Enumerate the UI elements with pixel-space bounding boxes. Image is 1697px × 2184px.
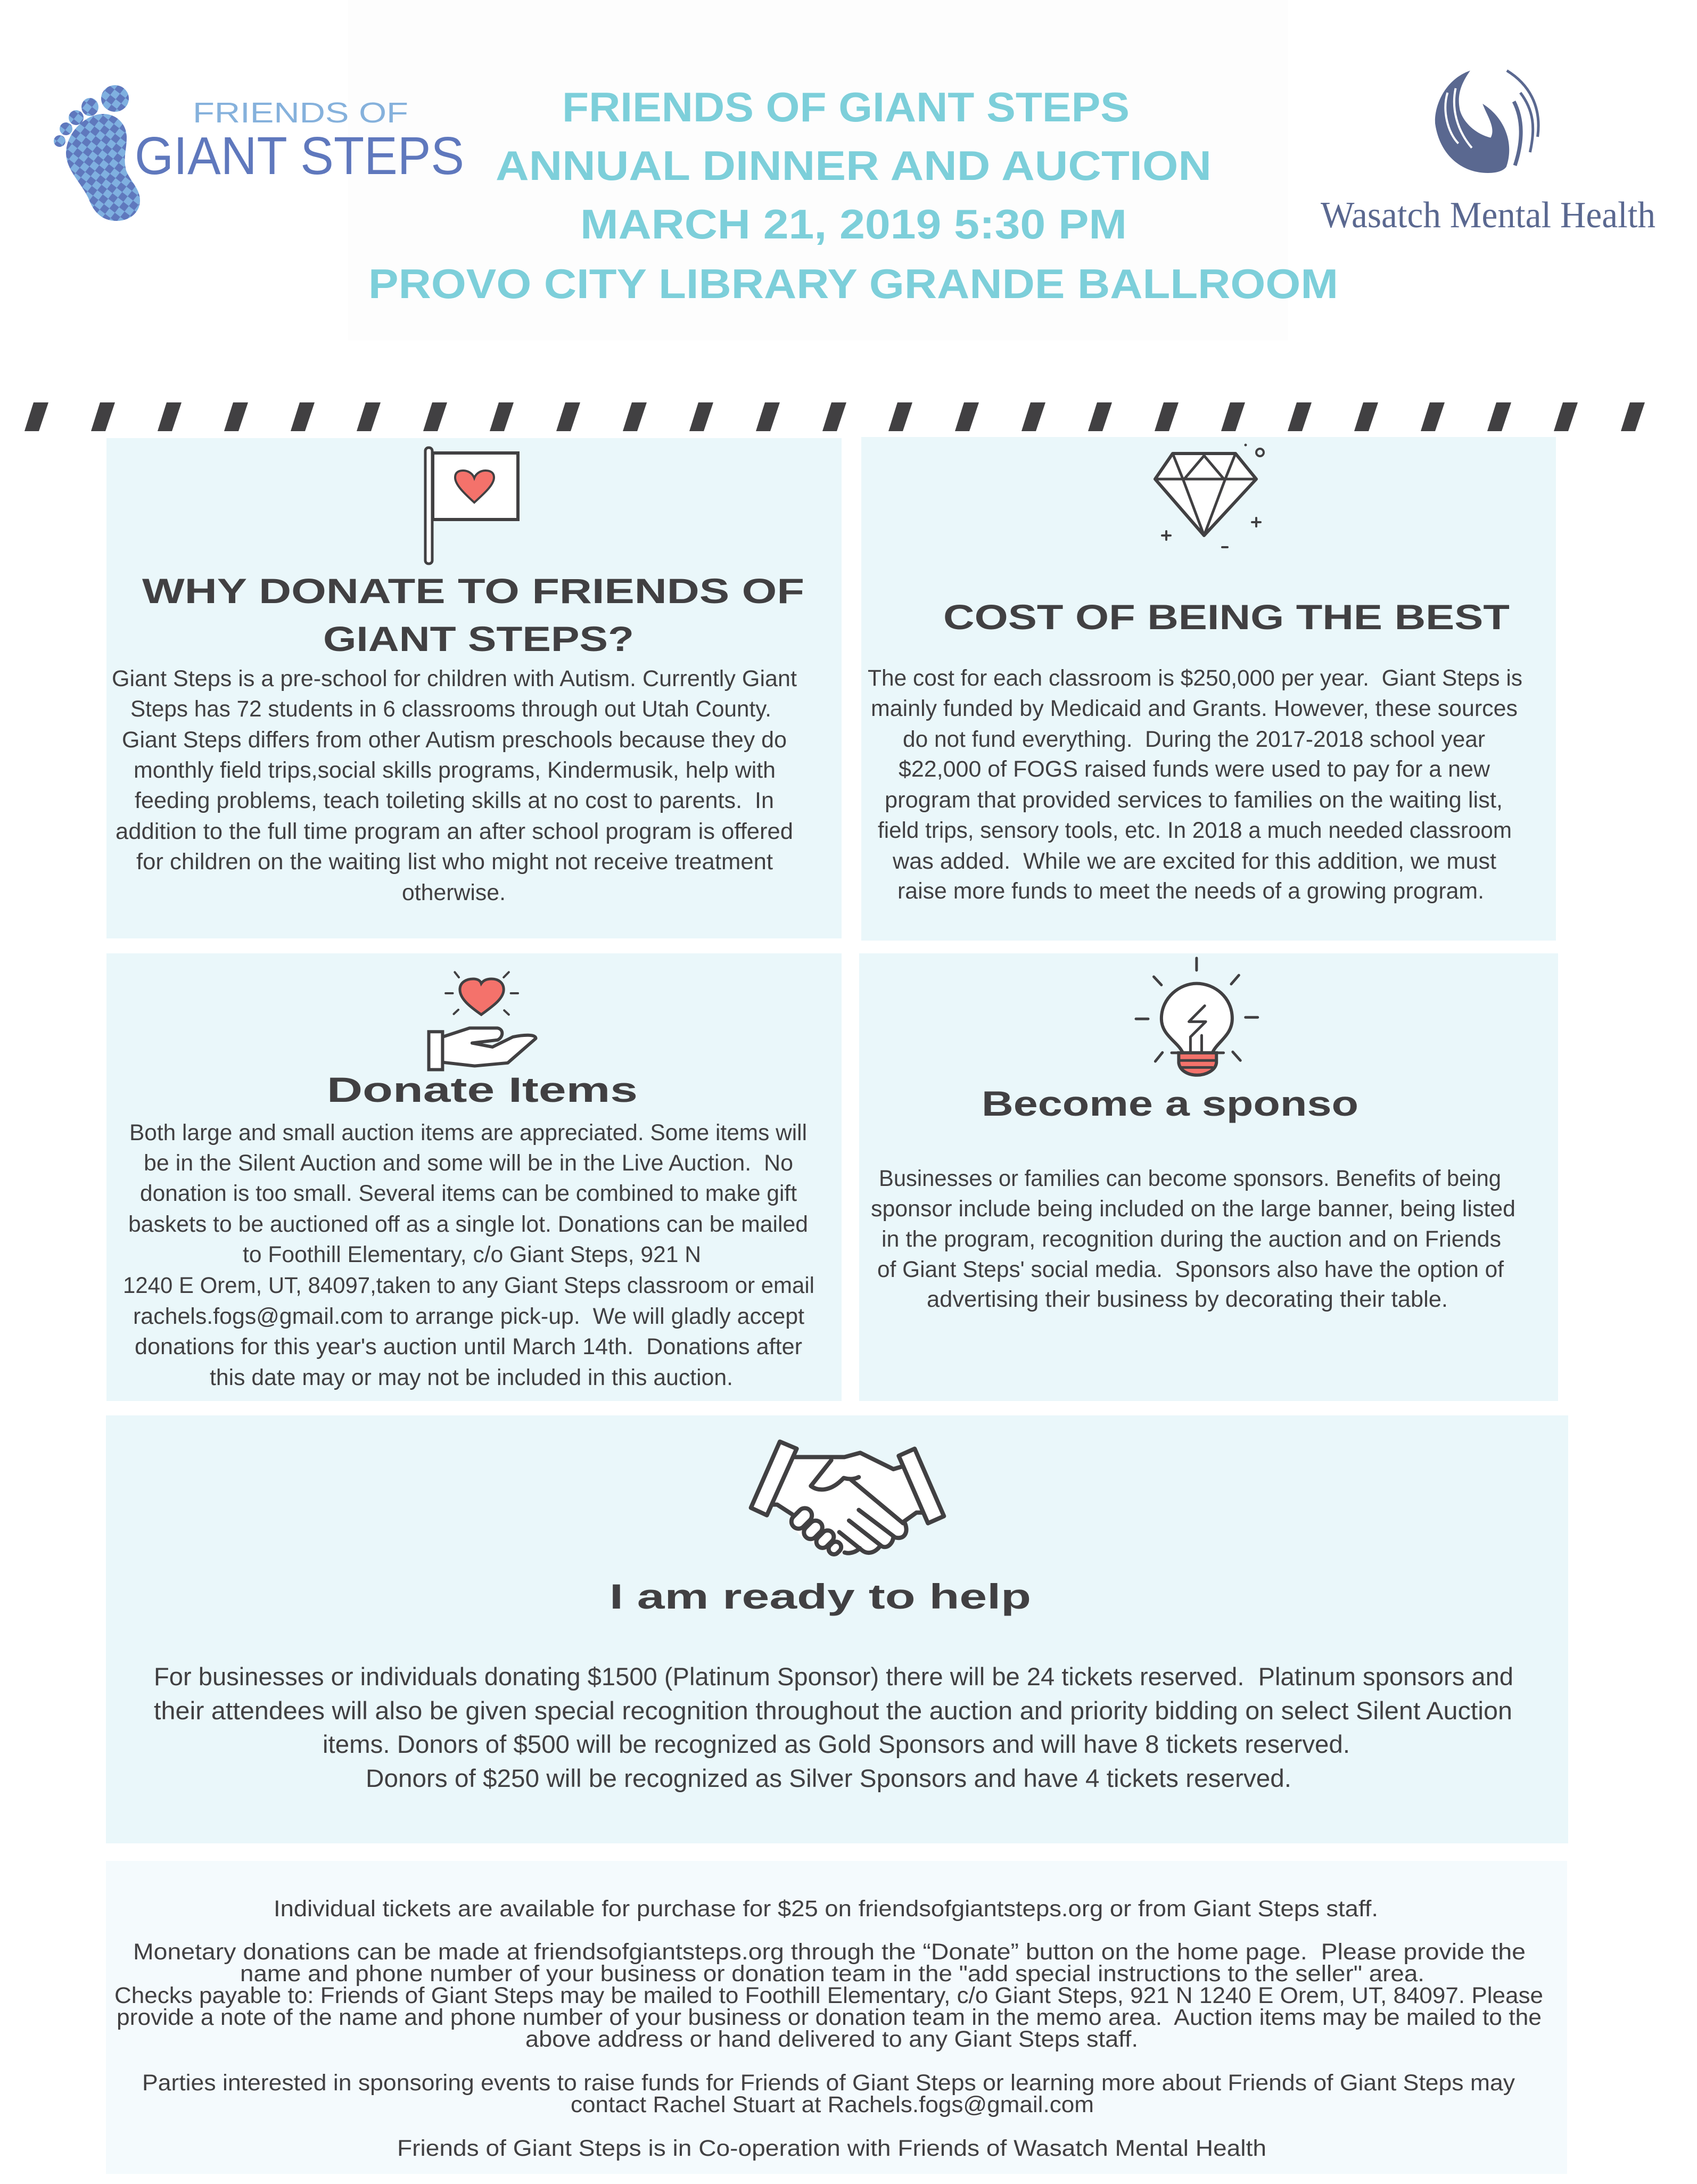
text block: baskets to be auctioned off as a single lot. Donations can be mailed	[128, 1211, 808, 1237]
divider: slanted dashes	[24, 402, 1645, 431]
icon: puzzle footprint	[54, 85, 140, 221]
text block: name and phone number of your business or donation team in the "add special instructions to the seller" area.	[240, 1961, 1424, 1987]
text block: mainly funded by Medicaid and Grants. However, these sources	[871, 696, 1518, 721]
text block: $22,000 of FOGS raised funds were used to pay for a new	[899, 756, 1490, 782]
text block	[123, 1120, 814, 1390]
text block: raise more funds to meet the needs of a growing program.	[897, 878, 1484, 904]
icon: hand holding heart	[429, 972, 536, 1069]
text block: Donors of $250 will be recognized as Silver Sponsors and have 4 tickets reserved.	[366, 1764, 1291, 1792]
logo: Friends of Giant Steps: GIANT STEPS	[135, 126, 464, 186]
text block: donation is too small. Several items can be combined to make gift	[140, 1181, 797, 1206]
panel: become a sponsor	[859, 953, 1558, 1401]
icon: cupped hands	[1435, 71, 1538, 173]
title: event name, date and venue: PROVO CITY LIBRARY GRANDE BALLROOM	[368, 260, 1338, 307]
title: event name, date and venue: MARCH 21, 2019 5:30 PM	[580, 201, 1127, 248]
panel: I am ready to help	[106, 1415, 1568, 1843]
text block: this date may or may not be included in this auction.	[210, 1365, 733, 1390]
text block: Monetary donations can be made at friendsofgiantsteps.org through the “Donate” button on the home page. Please provide the	[133, 1939, 1526, 1965]
title: event name, date and venue: FRIENDS OF GIANT STEPS	[562, 84, 1130, 130]
text block: sponsor include being included on the large banner, being listed	[871, 1196, 1515, 1222]
text block: Businesses or families can become sponsors. Benefits of being	[879, 1166, 1501, 1191]
text block: advertising their business by decorating their table.	[927, 1287, 1448, 1312]
heading: COST OF BEING THE BEST	[943, 597, 1510, 637]
text block: The cost for each classroom is $250,000 per year. Giant Steps is	[868, 665, 1522, 691]
text block: program that provided services to families on the waiting list,	[885, 787, 1503, 813]
text block: Parties interested in sponsoring events to raise funds for Friends of Giant Steps or learning more about Friends of Giant Steps may	[142, 2070, 1515, 2096]
text block: For businesses or individuals donating $1500 (Platinum Sponsor) there will be 24 tickets reserved. Platinum sponsors and	[154, 1662, 1513, 1691]
text block: Friends of Giant Steps is in Co-operation with Friends of Wasatch Mental Health	[397, 2136, 1266, 2161]
text block	[112, 666, 797, 905]
logo: Friends of Giant Steps	[54, 85, 464, 221]
text block: Individual tickets are available for purchase for $25 on friendsofgiantsteps.org or from Giant Steps staff.	[274, 1896, 1378, 1922]
heading: I am ready to help	[609, 1577, 1031, 1616]
logo: Wasatch Mental Health: Wasatch Mental Health	[1321, 195, 1655, 236]
title: event name, date and venue: ANNUAL DINNER AND AUCTION	[496, 142, 1212, 189]
text block: provide a note of the name and phone number of your business or donation team in the memo area. Auction items may be mailed to the	[117, 2005, 1542, 2030]
text block: their attendees will also be given special recognition throughout the auction and priority bidding on select Silent Auction	[154, 1696, 1512, 1725]
panel: cost of being the best	[861, 437, 1556, 941]
text block: otherwise.	[402, 880, 506, 905]
icon: diamond	[1155, 444, 1264, 547]
text block: monthly field trips,social skills programs, Kindermusik, help with	[134, 757, 776, 783]
text block	[871, 1166, 1515, 1312]
heading: WHY DONATE TO FRIENDS OF	[142, 571, 804, 611]
text block: contact Rachel Stuart at Rachels.fogs@gmail.com	[571, 2092, 1094, 2117]
text block: Both large and small auction items are appreciated. Some items will	[129, 1120, 807, 1145]
logo: Wasatch Mental Health	[1321, 71, 1655, 236]
text block: be in the Silent Auction and some will be in the Live Auction. No	[144, 1150, 793, 1176]
text block: of Giant Steps' social media. Sponsors also have the option of	[877, 1257, 1504, 1282]
text block: above address or hand delivered to any Giant Steps staff.	[525, 2026, 1138, 2052]
text block: addition to the full time program an after school program is offered	[116, 819, 793, 844]
text block: in the program, recognition during the auction and on Friends	[882, 1226, 1501, 1252]
text block: was added. While we are excited for this addition, we must	[892, 848, 1496, 874]
icon: light bulb	[1136, 958, 1258, 1075]
text block: do not fund everything. During the 2017-2018 school year	[903, 727, 1485, 752]
text block: Steps has 72 students in 6 classrooms through out Utah County.	[130, 696, 771, 722]
text block: to Foothill Elementary, c/o Giant Steps, 921 N	[243, 1242, 701, 1267]
text block: rachels.fogs@gmail.com to arrange pick-up. We will gladly accept	[133, 1304, 804, 1329]
text block: Checks payable to: Friends of Giant Steps may be mailed to Foothill Elementary, c/o Giant Steps, 921 N 1240 E Orem, UT, 84097. Please	[114, 1983, 1543, 2008]
logo: Friends of Giant Steps: FRIENDS OF	[193, 97, 408, 129]
icon: handshake	[751, 1441, 944, 1556]
text block: items. Donors of $500 will be recognized as Gold Sponsors and will have 8 tickets reserved.	[323, 1730, 1350, 1758]
panel: donate items	[106, 953, 842, 1401]
heading: Donate Items	[327, 1070, 638, 1109]
text block: 1240 E Orem, UT, 84097,taken to any Giant Steps classroom or email	[123, 1273, 814, 1298]
icon: flag with heart	[425, 448, 518, 564]
text block: feeding problems, teach toileting skills at no cost to parents. In	[135, 788, 774, 813]
text block	[114, 1896, 1543, 2161]
heading: GIANT STEPS?	[323, 619, 634, 658]
text block	[154, 1662, 1513, 1792]
text block: Giant Steps differs from other Autism preschools because they do	[122, 727, 787, 753]
panel: why donate	[106, 438, 842, 938]
text block: donations for this year's auction until March 14th. Donations after	[135, 1334, 802, 1359]
heading: Become a sponso	[982, 1084, 1358, 1123]
panel: tickets and donation information	[106, 1861, 1567, 2174]
text block	[868, 665, 1522, 904]
title: event name, date and venue	[368, 84, 1338, 307]
heading	[142, 571, 804, 658]
text block: for children on the waiting list who might not receive treatment	[136, 849, 773, 875]
text block: Giant Steps is a pre-school for children with Autism. Currently Giant	[112, 666, 797, 691]
text block: field trips, sensory tools, etc. In 2018 a much needed classroom	[878, 818, 1512, 843]
